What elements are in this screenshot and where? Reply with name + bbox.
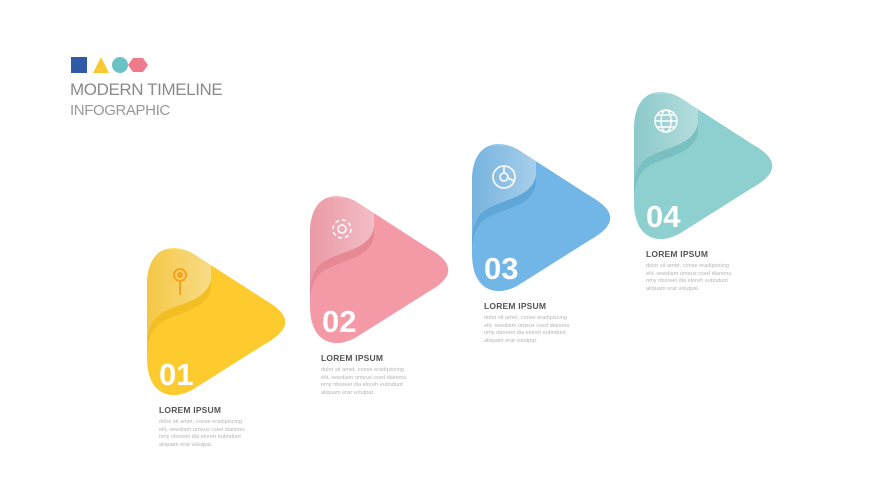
text: step 4: [646, 249, 732, 292]
icon: chart: [493, 166, 515, 188]
text: step 2: [321, 353, 407, 396]
text: step 2: elit, sewdiam umeus csed dianonu: [321, 375, 407, 381]
text: step 3: nmy nboreet dia eloreh eutindunt: [484, 330, 566, 336]
text: step 1: LOREM IPSUM: [159, 405, 221, 415]
text: step 4: elit, sewdiam umeus csed dianonu: [646, 271, 732, 277]
step 3: [472, 141, 610, 291]
text: step 2: dolor sit amet, conse eradipiscing: [321, 367, 404, 373]
text: step 1: nmy nboreet dia eloreh eutindunt: [159, 434, 241, 440]
title: INFOGRAPHIC: [70, 102, 170, 119]
text: step 4: LOREM IPSUM: [646, 249, 708, 259]
text: step 4: aliquam erat volutpat.: [646, 286, 699, 292]
timeline chart: [146, 92, 772, 395]
text: step 1: dolor sit amet, conse eradipiscing: [159, 419, 242, 425]
text: step 1: [159, 405, 245, 448]
text: step 1: elit, sewdiam umeus csed dianonu: [159, 427, 245, 433]
title: MODERN TIMELINE: [70, 80, 222, 99]
text: step 3: aliquam erat volutpat.: [484, 338, 537, 344]
step 4: 04: [646, 199, 681, 234]
header logo shapes: [71, 57, 148, 73]
text: step 2: aliquam erat volutpat.: [321, 390, 374, 396]
text: step 3: dolor sit amet, conse eradipiscing: [484, 315, 567, 321]
text: step 3: [484, 301, 570, 344]
text: step 1: aliquam erat volutpat.: [159, 442, 212, 448]
step 4: [634, 89, 772, 239]
step 3: 03: [484, 251, 518, 286]
icon: globe: [655, 110, 677, 132]
title: [70, 80, 222, 119]
step 1: [147, 245, 285, 395]
text: step 2: nmy nboreet dia eloreh eutindunt: [321, 382, 403, 388]
step 2: [310, 193, 448, 343]
text: step 3: LOREM IPSUM: [484, 301, 546, 311]
text: step 3: elit, sewdiam umeus csed dianonu: [484, 323, 570, 329]
step 2: 02: [322, 304, 356, 339]
text: step 4: nmy nboreet dia eloreh eutindunt: [646, 278, 728, 284]
text: step 4: dolor sit amet, conse eradipiscing: [646, 263, 729, 269]
icon: key/search: [174, 269, 186, 295]
text: step 2: LOREM IPSUM: [321, 353, 383, 363]
icon: gear: [333, 220, 351, 238]
step 1: 01: [159, 357, 193, 392]
